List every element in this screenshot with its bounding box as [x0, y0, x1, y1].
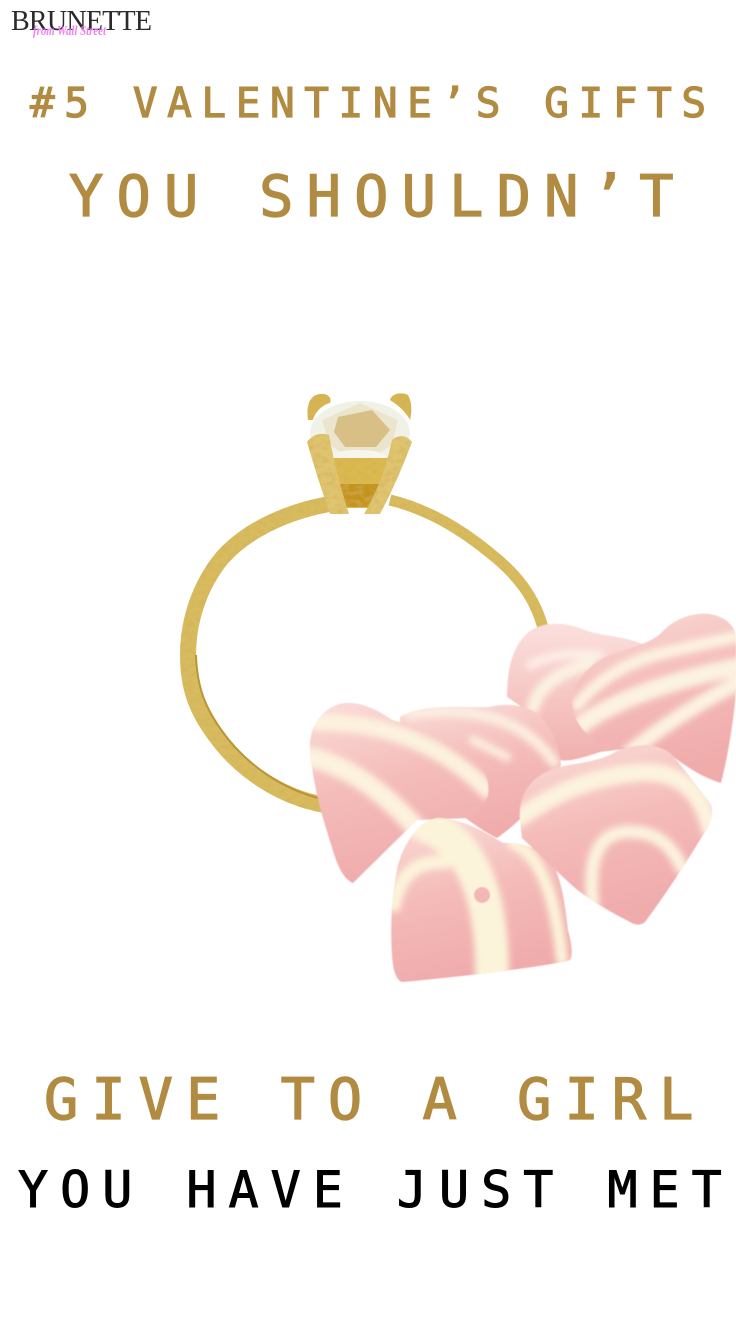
- image: gold ring with gemstone: [188, 393, 543, 805]
- chocolate: back middle: [400, 704, 562, 838]
- gemstone: [310, 401, 410, 465]
- heading line 2: YOU SHOULDN’T: [69, 164, 687, 230]
- logo: Brunette from Wall Street: BRUNETTE: [11, 6, 152, 37]
- ring band: [188, 500, 543, 805]
- chocolate: front top right: [565, 610, 736, 790]
- image: pink heart chocolates: [305, 610, 736, 985]
- closing line 2: YOU HAVE JUST MET: [18, 1161, 734, 1219]
- chocolate: front left: [310, 702, 489, 884]
- heading line 1: #5 VALENTINE’S GIFTS: [30, 79, 716, 127]
- chocolate: front bottom: [385, 815, 575, 985]
- closing line 1: GIVE TO A GIRL: [44, 1067, 706, 1133]
- ring setting and prongs: [307, 393, 412, 514]
- chocolate: right middle: [515, 740, 715, 930]
- chocolate: back right: [506, 624, 642, 761]
- logo: Brunette from Wall Street: from Wall Street: [33, 24, 107, 39]
